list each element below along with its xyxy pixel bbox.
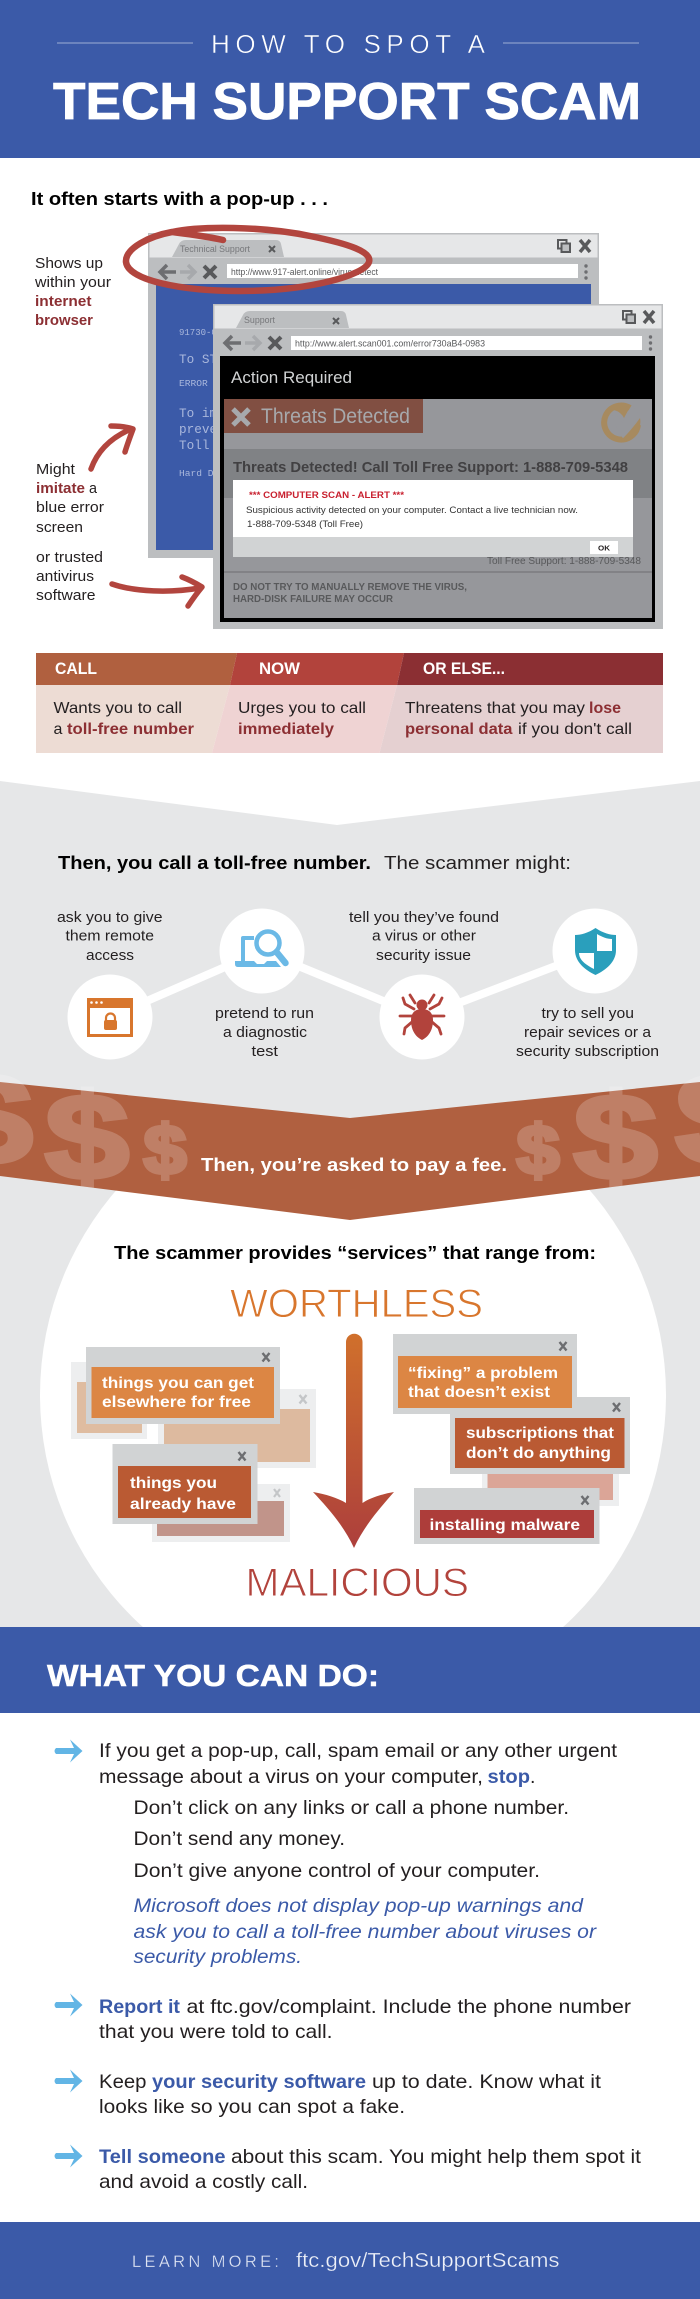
text: try to sell you repair services: try to sell you	[542, 1005, 634, 1022]
grey background section	[0, 781, 700, 1640]
arrow: to blue screen	[91, 426, 133, 469]
faded popup behind	[482, 1470, 619, 1506]
dollar signs: $	[517, 1110, 559, 1189]
alert dialog	[233, 480, 633, 557]
blue screen error text: To STOP	[179, 352, 232, 367]
panel: fake blue error browser window	[148, 233, 599, 558]
text: or trusted antivirus software: software	[36, 588, 96, 604]
blue screen error text: ERROR 0x0	[179, 378, 231, 389]
warning text: DO NOT TRY TO MANUALLY REMOVE THE VIRUS,	[233, 582, 467, 593]
text: tell someone: and avoid a costly call.	[99, 2171, 308, 2193]
heading: services range: The scammer provides “services” that range from:	[114, 1242, 596, 1263]
popup: things you already have: already have	[130, 1496, 236, 1513]
text: might imitate a blue error screen	[36, 462, 104, 536]
popups: right column	[393, 1334, 630, 1544]
text: shows up within your internet browser: internet	[35, 294, 92, 310]
tip: report it	[54, 1994, 632, 2043]
text: shows up within your internet browser: browser	[35, 313, 93, 329]
tip: tell someone	[54, 2144, 642, 2193]
tip: stop	[54, 1740, 618, 1968]
text: shows up within your internet browser: Shows up	[35, 256, 103, 272]
hidden support text: Toll Free Support: 1-888-709-5348	[487, 556, 641, 567]
step: found a virus	[349, 909, 499, 1060]
browser tab	[236, 311, 349, 328]
text: security software	[99, 2071, 602, 2118]
text: stop: .	[530, 1766, 535, 1788]
popup: fixing a problem: “fixing” a problem	[408, 1365, 558, 1382]
dollar signs: $	[45, 1069, 129, 1206]
popup: installing malware: installing malware	[430, 1517, 580, 1534]
text: security software: Keep	[99, 2071, 147, 2093]
column: call: CALL	[55, 659, 97, 678]
alert dialog: OK	[598, 544, 611, 552]
main title: TECH SUPPORT SCAM	[53, 73, 641, 131]
icon: arrow	[54, 1994, 82, 2016]
browser tab: Support	[244, 315, 275, 326]
text: dont list	[134, 1797, 569, 1882]
text: might imitate a blue error screen: screen	[36, 520, 83, 536]
threats detected badge	[224, 399, 423, 433]
warning text	[233, 582, 467, 605]
text: microsoft note: security problems.	[134, 1946, 302, 1968]
band label: Then, you’re asked to pay a fee.	[201, 1154, 507, 1175]
text: stop: stop	[488, 1766, 530, 1788]
threat headline: Threats Detected! Call Toll Free Support: 1-888-709-5348	[233, 459, 628, 476]
browser tab	[172, 240, 284, 257]
alert dialog: *** COMPUTER SCAN - ALERT ***	[249, 490, 404, 501]
text: might imitate a blue error screen: blue error	[36, 500, 104, 516]
blue screen error text: Hard Disk	[179, 468, 231, 479]
popup: things you can get elsewhere for free	[86, 1347, 280, 1424]
column: now: immediately	[238, 721, 334, 738]
threats detected badge: Threats Detected	[261, 405, 410, 428]
warning text: HARD-DISK FAILURE MAY OCCUR	[233, 594, 394, 605]
text: pretend to run a diagnostic test: test	[252, 1043, 279, 1060]
step: sell repair services	[516, 908, 659, 1060]
text: tell you they've found a virus: security issue	[376, 947, 471, 964]
step: remote access	[57, 909, 162, 1060]
text: dont list: Don’t send any money.	[134, 1828, 345, 1850]
faded popup lower	[152, 1484, 290, 1542]
text: or trusted antivirus software: or trusted	[36, 550, 103, 566]
blue screen error text: Toll Free	[179, 438, 248, 453]
dollar signs: $	[573, 1069, 658, 1206]
text: stop: message about a virus on your computer,	[99, 1766, 483, 1788]
text: ask you to give them remote access	[57, 909, 162, 964]
step: diagnostic test	[215, 908, 314, 1060]
icon: shield	[575, 928, 616, 975]
icon: arrow	[54, 2144, 82, 2168]
arrow: to antivirus window	[112, 577, 202, 606]
address bar: http://www.alert.scan001.com/error730aB4-0983	[295, 338, 485, 350]
text: ask you to give them remote access: them remote	[66, 928, 154, 944]
icon: arrow	[54, 2070, 82, 2092]
address bar	[227, 264, 578, 278]
icon: bug	[400, 995, 444, 1040]
text: tell someone: Tell someone	[99, 2146, 226, 2168]
text: pretend to run a diagnostic test: pretend to run	[215, 1005, 314, 1022]
column: call: toll-free number	[67, 721, 194, 738]
blue screen error text	[180, 329, 213, 476]
tip: security software	[54, 2070, 602, 2118]
band: asked to pay a fee	[0, 1082, 700, 1220]
blue screen error text: To immed	[179, 406, 240, 421]
popup: fixing a problem	[393, 1334, 577, 1414]
column: or else: personal data	[405, 721, 513, 738]
popup: fixing a problem: that doesn’t exist	[408, 1384, 550, 1401]
text: security software: your security software	[152, 2071, 366, 2093]
text: dont list: Don’t give anyone control of your computer.	[134, 1860, 540, 1882]
popup: things you can get elsewhere for free: elsewhere for free	[102, 1394, 251, 1411]
text: report it: that you were told to call.	[99, 2021, 332, 2043]
heading: toll-free number: Then, you call a toll-free number.	[58, 852, 371, 873]
title kicker: HOW TO SPOT A	[211, 29, 486, 59]
footer url: ftc.gov/TechSupportScams	[296, 2250, 560, 2272]
column: now: NOW	[259, 659, 301, 678]
blue screen error text: prevent	[179, 422, 232, 437]
text: pretend to run a diagnostic test	[215, 1005, 314, 1060]
header banner	[0, 0, 700, 158]
text: tell you they've found a virus	[349, 909, 499, 964]
text: or trusted antivirus software	[36, 550, 103, 604]
text: ask you to give them remote access: access	[86, 947, 134, 964]
text: try to sell you repair services: security subscription	[516, 1043, 659, 1060]
text: pretend to run a diagnostic test: a diagnostic	[223, 1024, 308, 1041]
popup: things you already have	[112, 1444, 258, 1524]
text: stop: If you get a pop-up, call, spam email or any other urgent	[99, 1740, 618, 1762]
heading: toll-free number	[58, 852, 571, 873]
faded popup back right	[158, 1389, 316, 1468]
learn more label: LEARN MORE:	[132, 2253, 279, 2271]
heading: toll-free number: The scammer might:	[384, 852, 571, 873]
text: report it: Report it	[99, 1996, 181, 2018]
alert dialog: 1-888-709-5348 (Toll Free)	[247, 519, 363, 530]
dollar signs	[0, 1047, 700, 1206]
column: or else: OR ELSE...	[423, 659, 505, 678]
text: report it	[99, 1996, 632, 2043]
label: malicious: MALICIOUS	[246, 1561, 469, 1605]
footer	[0, 2222, 700, 2299]
text: dont list: Don’t click on any links or call a phone number.	[134, 1797, 569, 1819]
faded popup back left	[71, 1362, 147, 1439]
text: might imitate a blue error screen: a	[89, 481, 98, 497]
text: report it: at ftc.gov/complaint. Include the phone number	[186, 1996, 632, 2018]
popup: installing malware	[414, 1488, 600, 1544]
section header: what you can do: WHAT YOU CAN DO:	[47, 1658, 379, 1693]
text: might imitate a blue error screen: imitate	[36, 481, 85, 497]
column: or else: Threatens that you may	[405, 700, 585, 717]
connector line	[110, 951, 595, 1017]
dollar signs: $	[144, 1110, 186, 1189]
text: tell you they've found a virus: a virus or other	[372, 928, 476, 944]
column: call	[54, 659, 194, 738]
alert dialog: Suspicious activity detected on your computer. Contact a live technician now.	[246, 505, 578, 516]
panel: fake antivirus browser window	[213, 304, 663, 629]
column: now: Urges you to call	[238, 700, 366, 717]
popup: subscriptions: subscriptions that	[466, 1425, 614, 1442]
heading: pop-up: It often starts with a pop-up . . .	[31, 188, 328, 209]
text: security software: up to date. Know what it	[372, 2071, 602, 2093]
browser tab: Technical Support	[180, 244, 250, 255]
text: shows up within your internet browser	[34, 256, 111, 329]
address bar	[291, 336, 642, 350]
text: tell someone: about this scam. You might help them spot it	[231, 2146, 642, 2168]
popup: things you can get elsewhere for free: things you can get	[102, 1375, 254, 1392]
icon: browser with lock	[87, 998, 133, 1037]
text: microsoft note: Microsoft does not display pop-up warnings and	[134, 1895, 584, 1917]
address bar: http://www.917-alert.online/virus-detect	[231, 267, 378, 278]
panel: call now or else	[36, 653, 663, 753]
icon: laptop with magnifier	[235, 932, 286, 967]
action required text: Action Required	[231, 368, 352, 387]
white circle background	[40, 1190, 666, 1627]
icon: arrow	[54, 1740, 82, 1762]
text: shows up within your internet browser: within your	[34, 275, 111, 291]
popup: things you already have: things you	[130, 1475, 217, 1492]
text: or trusted antivirus software: antivirus	[36, 569, 94, 585]
text: security software: looks like so you can spot a fake.	[99, 2096, 405, 2118]
column: or else: if you don't call	[518, 721, 632, 738]
text: microsoft note	[134, 1895, 598, 1968]
text: microsoft note: ask you to call a toll-free number about viruses or	[134, 1921, 598, 1943]
text: ask you to give them remote access: ask you to give	[57, 909, 162, 926]
column: call: a	[54, 721, 62, 738]
section header: what you can do	[0, 1627, 700, 1713]
column: call: Wants you to call	[54, 700, 182, 717]
popup: subscriptions: don’t do anything	[466, 1445, 611, 1462]
column: or else	[405, 659, 632, 738]
popups: left column	[71, 1347, 316, 1542]
red hand-drawn circle around browser tab	[126, 228, 369, 291]
text: tell someone	[99, 2146, 642, 2193]
arrow: worthless to malicious	[313, 1334, 394, 1548]
label: worthless: WORTHLESS	[230, 1282, 483, 1326]
text: try to sell you repair services	[516, 1005, 659, 1060]
text: try to sell you repair services: repair sevices or a	[524, 1024, 652, 1041]
blue screen error text: 91730-0983	[179, 328, 233, 338]
column: or else: lose	[589, 700, 621, 717]
text: might imitate a blue error screen: Might	[36, 462, 75, 478]
text: stop	[99, 1740, 618, 1788]
popup: subscriptions	[450, 1397, 630, 1474]
column: now	[238, 659, 366, 738]
antivirus check logo	[604, 405, 640, 441]
text: tell you they've found a virus: tell you they’ve found	[349, 909, 499, 926]
